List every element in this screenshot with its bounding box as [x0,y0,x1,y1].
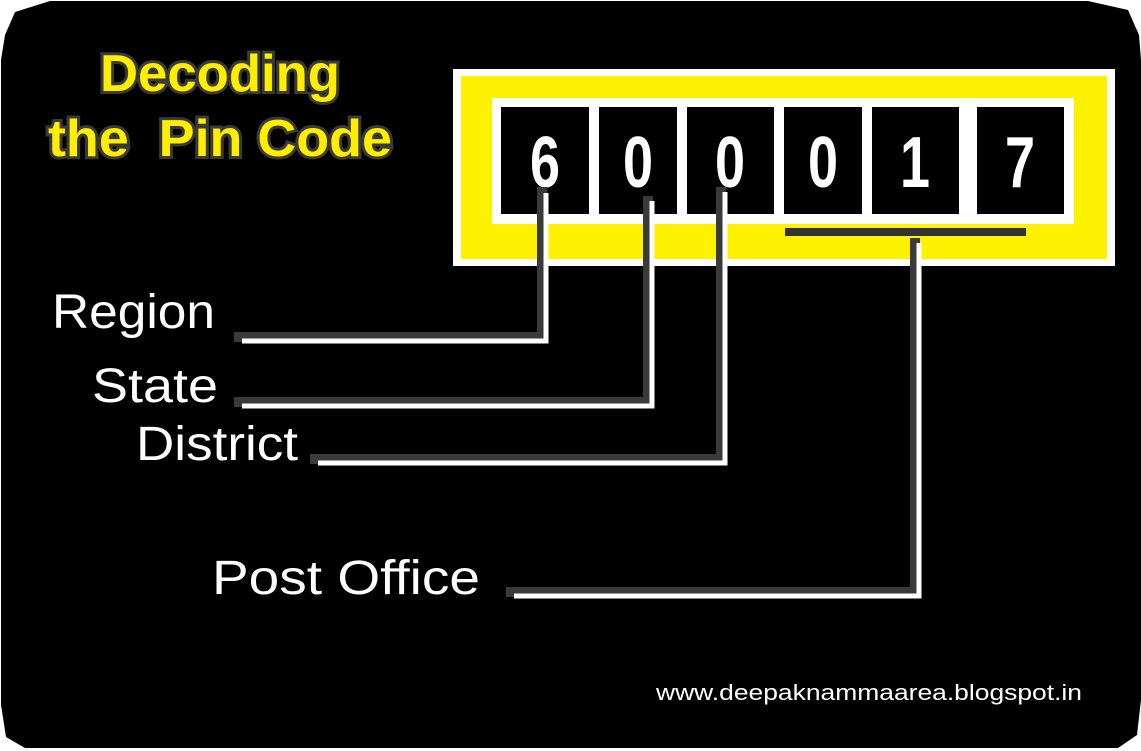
digits [530,123,1035,203]
labels [52,286,480,605]
connector lines [234,187,919,596]
labels: District [136,418,298,471]
pin code box [453,69,1115,266]
website credit: www.deepaknammaarea.blogspot.in [655,680,1082,705]
digits: 7 [1005,123,1035,203]
labels: State [92,360,218,413]
labels: Post Office [212,552,480,605]
digits: 0 [808,123,838,203]
digits: 6 [530,123,560,203]
digit boxes [501,107,1064,214]
title: the Pin Code [48,110,392,168]
digits: 0 [623,123,653,203]
digits: 1 [900,123,930,203]
labels: Region [52,286,215,339]
digits: 0 [715,123,745,203]
post office bracket bar [785,228,1026,236]
title [48,45,392,168]
title: Decoding [100,45,340,103]
